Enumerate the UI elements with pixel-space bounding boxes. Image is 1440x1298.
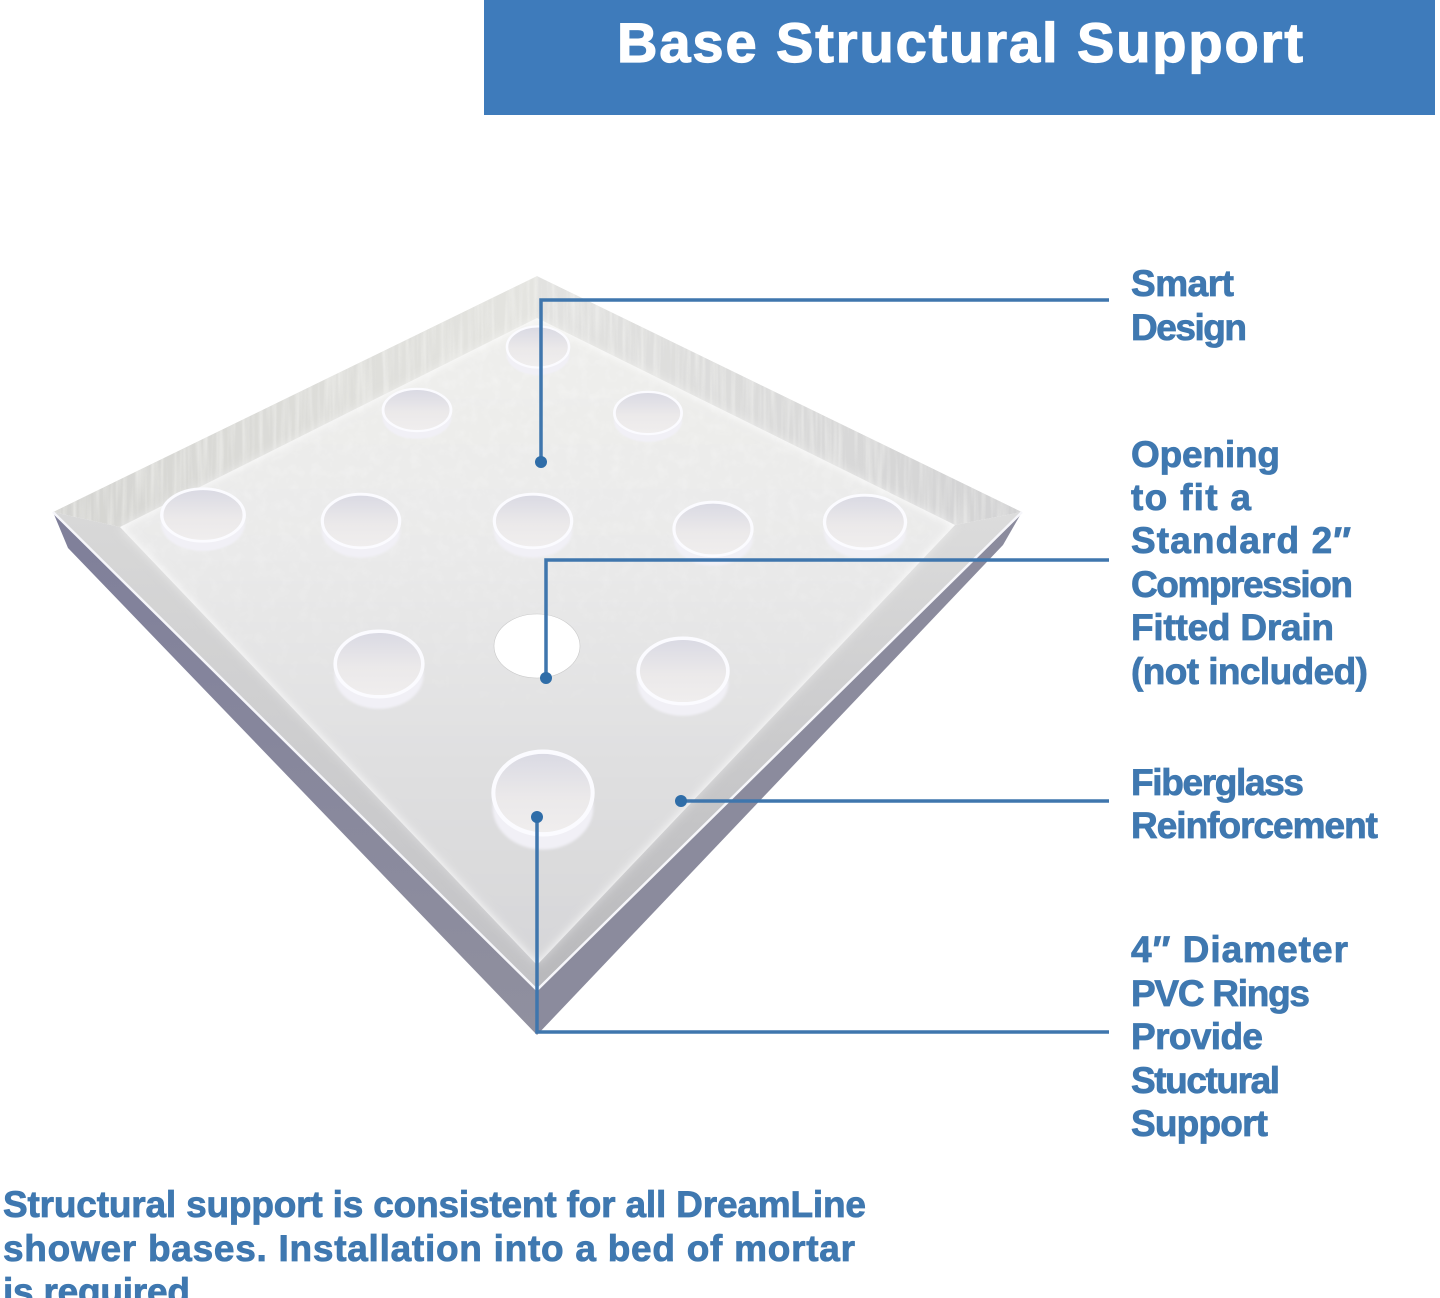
label: fiberglass reinforcement: Fiberglass — [1131, 762, 1304, 803]
shower base illustration — [40, 270, 1040, 1035]
label: smart design: Design — [1131, 307, 1247, 348]
footnote: shower bases. Installation into a bed of mortar — [3, 1228, 855, 1269]
footnote — [3, 1184, 866, 1298]
PVC ring 8 — [824, 495, 906, 559]
outer left side — [53, 512, 537, 1035]
PVC ring 5 — [322, 494, 400, 558]
label: drain opening: Fitted Drain — [1131, 607, 1334, 648]
outer right side — [537, 512, 1022, 1035]
callout line: drain opening — [540, 560, 1109, 684]
tray interior walls and floor — [40, 270, 1040, 990]
label: drain opening: to fit a — [1131, 477, 1251, 518]
PVC ring 3 — [614, 392, 682, 442]
label: PVC rings — [1131, 929, 1348, 1144]
header banner — [484, 0, 1435, 115]
label: smart design: Smart — [1131, 263, 1234, 304]
PVC ring 9 — [335, 631, 423, 709]
label: PVC rings: Stuctural — [1131, 1060, 1280, 1101]
label: drain opening: Standard 2″ — [1131, 520, 1351, 561]
PVC ring 4 — [161, 489, 245, 551]
label: PVC rings: Support — [1131, 1103, 1268, 1144]
PVC ring 1 — [507, 326, 569, 375]
label: fiberglass reinforcement: Reinforcement — [1131, 805, 1378, 846]
callout line: smart design — [535, 300, 1109, 468]
label: drain opening: Opening — [1131, 434, 1280, 475]
PVC ring 11 — [493, 752, 593, 850]
footnote: Structural support is consistent for all DreamLine — [3, 1184, 866, 1225]
label: PVC rings: Provide — [1131, 1016, 1263, 1057]
label: PVC rings: 4″ Diameter — [1131, 929, 1348, 970]
PVC ring 10 — [637, 638, 729, 716]
callout line: fiberglass — [675, 795, 1109, 807]
label: PVC rings: PVC Rings — [1131, 973, 1310, 1014]
label: fiberglass reinforcement — [1131, 762, 1378, 846]
drain opening — [494, 614, 580, 678]
PVC ring 6 — [494, 494, 572, 558]
callout line: PVC rings — [531, 811, 1109, 1032]
rim highlights — [53, 512, 1022, 990]
header banner: Base Structural Support — [617, 11, 1303, 74]
label: drain opening: (not included) — [1131, 651, 1368, 692]
PVC ring 2 — [383, 389, 451, 439]
PVC ring 7 — [673, 502, 753, 566]
label: drain opening — [1131, 434, 1368, 692]
label: drain opening: Compression — [1131, 564, 1353, 605]
label: smart design — [1131, 263, 1247, 348]
